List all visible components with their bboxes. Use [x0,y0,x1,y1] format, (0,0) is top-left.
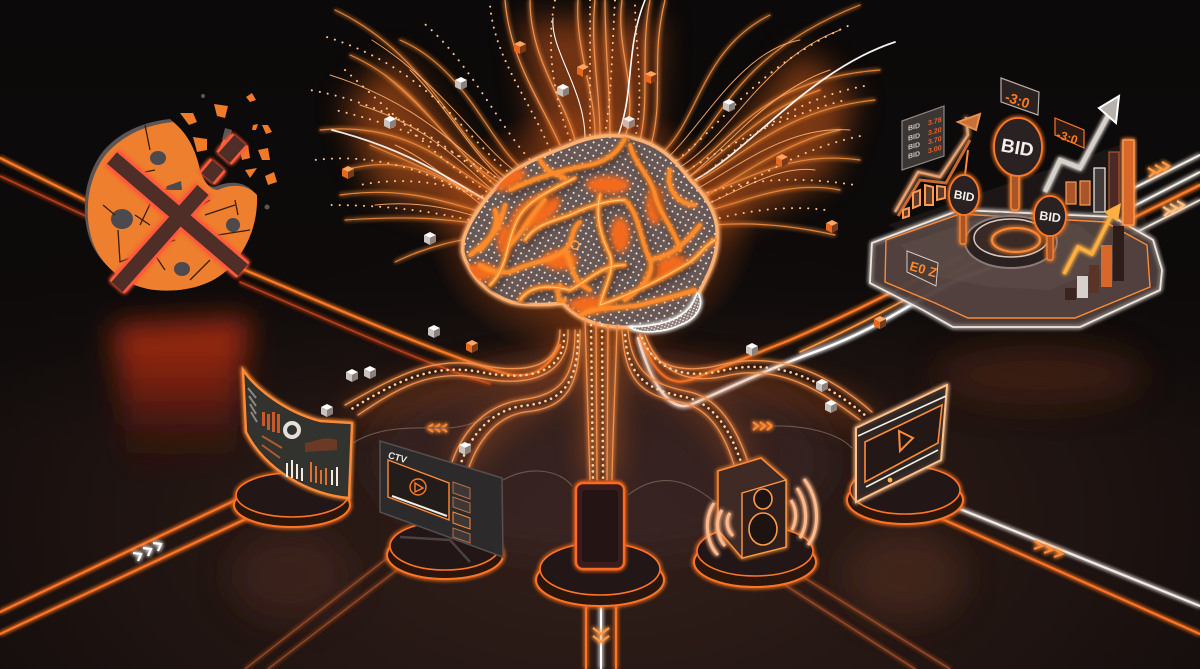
bid list board: 3.70 [928,135,942,146]
browser video frame [865,405,942,482]
chevrons bottom left [133,543,161,561]
bid list board: BID [908,150,920,161]
CTV base [387,522,503,579]
data line: bottom right [785,505,1200,669]
CTV video frame [388,460,449,520]
bid label right: BID [1039,209,1062,225]
bid list board: 3.78 [928,116,942,127]
bid list board: BID [908,141,920,152]
brain halo [427,104,757,360]
octagon inner [885,214,1150,318]
CTV screen [380,441,503,557]
stem: central stream to devices [345,320,872,480]
data line: left trunk through cookie [0,158,560,384]
price display right: -3:0 [1055,127,1080,147]
price display top: -3:0 [1003,88,1032,111]
stream to browser [640,335,872,412]
price display top [1001,78,1039,115]
panel: bidding platform [870,78,1184,327]
cookie cracks [103,125,250,280]
phone body [576,483,624,569]
CTV play icon [410,479,426,495]
dashboard screen [243,370,352,498]
fold shadows [492,141,692,308]
panel: CTV monitor [380,441,503,579]
particle wing: right [660,5,895,235]
speaker front [742,480,786,558]
rising chart left [895,114,980,218]
bid list board: 3.20 [928,126,942,137]
chevrons CTV link [428,424,447,432]
CTV label: CTV [387,450,409,466]
cortex detail [462,138,715,320]
dashboard base [234,473,350,527]
floor reflections [112,318,1145,620]
browser toolbar [858,396,946,436]
bid label left: BID [953,187,976,205]
neon cross mark [112,140,243,287]
thin connector wires [353,416,852,505]
brain [427,104,757,360]
bid list board: BID [908,132,920,143]
cerebellum [630,293,701,332]
panel: video browser [847,385,963,524]
panel: speaker [694,458,817,587]
hologram backdrop [888,145,1153,260]
chevrons speaker link [753,422,772,430]
browser base [847,466,963,524]
bid paddle left [949,175,979,244]
cookie rim [85,119,254,288]
speaker base [694,526,816,587]
bid list board [902,106,944,170]
gold rising arrow [1064,203,1121,274]
stream to dashboard [345,330,560,405]
data line: right trunk to bid platform [638,155,1200,406]
price tag on platform [907,251,939,286]
browser progress [866,450,938,487]
orange heat patches [462,164,690,314]
central ring [965,216,1057,268]
CTV progress bar [392,496,447,516]
glowing fissures [470,138,715,320]
octagon core [900,212,1120,290]
brain core node [571,241,579,249]
price tag on platform: E0 Z [908,258,939,280]
data line: bottom centre [586,603,616,669]
chevrons on right lines [1148,162,1184,216]
dashboard charts [248,388,338,486]
bid list board: 3.00 [928,144,942,155]
bid label centre: BID [999,135,1035,162]
panel: curved dashboard [234,370,352,527]
bar chart right [1066,140,1134,225]
panel: smartphone [536,483,664,606]
glow behind particle fans [345,20,875,480]
phone screen sheen [582,490,618,562]
chevrons bottom centre [593,628,609,642]
bid paddle centre [994,118,1042,210]
chevrons bottom right [1034,541,1062,557]
data cubes in fan [342,41,838,356]
particle fan: top centre [490,0,665,150]
stream to CTV [452,330,575,462]
octagon outer [870,210,1162,327]
CTV stand [400,537,470,562]
speaker drivers [749,489,777,545]
phone base [536,543,664,606]
particles near device streams [321,316,886,455]
rising white arrow [1045,96,1119,192]
fissure highlights [490,178,715,305]
cookie fragments [180,93,277,210]
stream to speaker [622,330,735,468]
particle wing: left [310,10,535,262]
front bar chart [1065,226,1124,300]
cookie chocolate chips [111,151,240,276]
panel: broken cookie [85,93,277,291]
CTV playlist [453,482,470,543]
cookie body [88,122,257,291]
speaker cabinet [718,458,786,558]
bid list board: BID [908,122,920,133]
bid paddle right [1034,196,1066,260]
browser play icon [899,431,913,451]
speaker sound waves [707,479,817,555]
brain silhouette [463,136,717,327]
browser window [856,385,947,502]
price display right [1055,118,1084,148]
data line: bottom left [0,498,410,669]
chevron markers on lines [133,422,1062,642]
